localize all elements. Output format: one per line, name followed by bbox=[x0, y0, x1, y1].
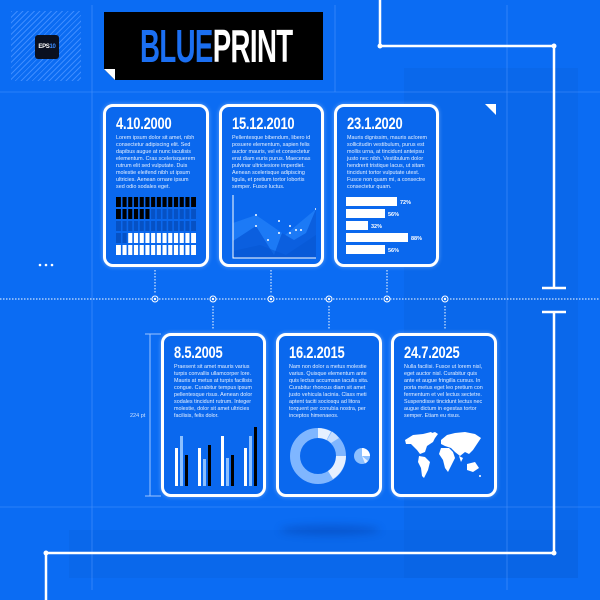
card 5 bbox=[276, 333, 382, 497]
card 5: varius. Quisque elementum ante bbox=[289, 371, 367, 377]
card 4: turpis convallis ullamcorper lore. bbox=[174, 371, 251, 377]
card 5: aptent taciti sociosqu ad litora bbox=[289, 399, 360, 405]
background lines and frame: 224 pt bbox=[130, 413, 146, 419]
card 2: 15.12.2010 bbox=[232, 114, 294, 133]
card 5: Nam non dolor a metus molestie bbox=[289, 364, 367, 370]
horizontal bar chart: 56% bbox=[388, 248, 399, 254]
card 2: auctor mauris, vel et consectetur bbox=[232, 149, 310, 155]
card 2: semper. Fusce luctus. bbox=[232, 184, 284, 190]
card 3: Fusce non quam mi, a consectre bbox=[347, 177, 425, 183]
card 3: tincidunt tortor vulputate utest. bbox=[347, 170, 419, 176]
card 4 bbox=[161, 333, 266, 497]
world map bbox=[405, 432, 481, 478]
card 3: 23.1.2020 bbox=[347, 114, 402, 133]
card 6: ante et augue fringilla cursus. In bbox=[404, 378, 480, 384]
horizontal bar chart: 88% bbox=[411, 236, 422, 242]
horizontal bar chart: 32% bbox=[371, 224, 382, 230]
card 3: Mauris dignissim, mauris aclorem bbox=[347, 135, 427, 141]
card 6 bbox=[391, 333, 497, 497]
card 6: eget auctor nisl. Curabitur quis bbox=[404, 371, 477, 377]
title bbox=[104, 12, 323, 80]
card 2: erat diam euris purus. Maecenas bbox=[232, 156, 311, 162]
area chart bbox=[232, 195, 316, 258]
horizontal bar chart: 56% bbox=[388, 212, 399, 218]
card 3: hendrerit tristique lacus, ut sitam bbox=[347, 163, 425, 169]
card 5: quis lectus accumsan iaculis sita. bbox=[289, 378, 368, 384]
card 2: posuere elementum, sapien felis bbox=[232, 142, 310, 148]
card 4: Praesent sit amet mauris varius bbox=[174, 364, 250, 370]
card 4: facilisis, felis dolor. bbox=[174, 413, 219, 419]
card 3: consectetur quam. bbox=[347, 184, 391, 190]
horizontal bar chart: 72% bbox=[400, 200, 411, 206]
card 4: Mauris at metus at turpis facilisis bbox=[174, 378, 252, 384]
card 6: augue dictum in egestas tortor bbox=[404, 406, 477, 412]
card 3: justo nec nibh. Vestibulum dolor bbox=[347, 156, 423, 162]
card 4: pellentesque risus. Aenean dolor bbox=[174, 392, 252, 398]
card 1: dapibus augue at nunc iaculisis bbox=[116, 149, 191, 155]
title: BLUEPRINT bbox=[140, 20, 293, 72]
card 6: fermentum et vel lectus sectetre. bbox=[404, 392, 482, 398]
card 1 bbox=[103, 104, 209, 267]
card 1: 4.10.2000 bbox=[116, 114, 171, 133]
EPS badge: EPS10 bbox=[38, 44, 56, 50]
card 4: sodales tincidunt rutrum. Integer bbox=[174, 399, 251, 405]
card 4: 8.5.2005 bbox=[174, 343, 222, 362]
dots bbox=[39, 264, 53, 266]
card 6: Suspendisse tincidunt lectus nec bbox=[404, 399, 482, 405]
card 1: molestie eleifend nibh ut ipsum bbox=[116, 170, 190, 176]
card 4: congue. Curabitur tempus ipsum bbox=[174, 385, 252, 391]
card 3 bbox=[334, 104, 439, 267]
bottom shadow bbox=[280, 525, 380, 535]
dimension marker bbox=[145, 334, 161, 496]
card 2: Aenean scelerisque adipiscing bbox=[232, 170, 305, 176]
vertical bar chart bbox=[175, 427, 257, 486]
card 5: 16.2.2015 bbox=[289, 343, 344, 362]
card 2: pulvinar ultriciesiore imperdiet. bbox=[232, 163, 305, 169]
waffle chart bbox=[116, 197, 196, 255]
card 2 bbox=[219, 104, 324, 267]
card 6: 24.7.2025 bbox=[404, 343, 459, 362]
donut chart bbox=[290, 428, 370, 484]
card 1: rutrum elit sed vulputate. Duis bbox=[116, 163, 187, 169]
card 3: sollicitudin vestibulum, purus est bbox=[347, 142, 424, 148]
card 5: inceptos himenaeos. bbox=[289, 413, 338, 419]
card 5: justo vehicula lacinia. Class meti bbox=[289, 392, 367, 398]
card 2: ligula, et pretium tortor lobortis bbox=[232, 177, 305, 183]
card 5: Curabitur rhoncus diam sit amet bbox=[289, 385, 365, 391]
card 6: semper. Etiam eu risus. bbox=[404, 413, 460, 419]
horizontal bar chart bbox=[346, 197, 422, 254]
card 1: consectetur adipiscing elit. Sed bbox=[116, 142, 190, 148]
card 6: porta metus eget leo pretium con bbox=[404, 385, 483, 391]
card 5: torquent per conubia nostra, per bbox=[289, 406, 366, 412]
card 4: molestie, dolor sit amet ultricies bbox=[174, 406, 249, 412]
card 1: elementum. Cras scelerisquerem bbox=[116, 156, 195, 162]
EPS badge bbox=[11, 11, 81, 81]
card 1: Lorem ipsum dolor sit amet, nibh bbox=[116, 135, 194, 141]
corner triangle bbox=[485, 104, 496, 115]
card 1: ultricies. Aenean ornare ipsum bbox=[116, 177, 189, 183]
card 2: Pellentesque bibendum, libero id bbox=[232, 135, 310, 141]
card 1: sed odio sodales eget. bbox=[116, 184, 170, 190]
card 6: Nulla facilisi. Fusce ut lorem nisl, bbox=[404, 364, 482, 370]
card 3: mollis urna, at tincidunt anteipsu bbox=[347, 149, 424, 155]
